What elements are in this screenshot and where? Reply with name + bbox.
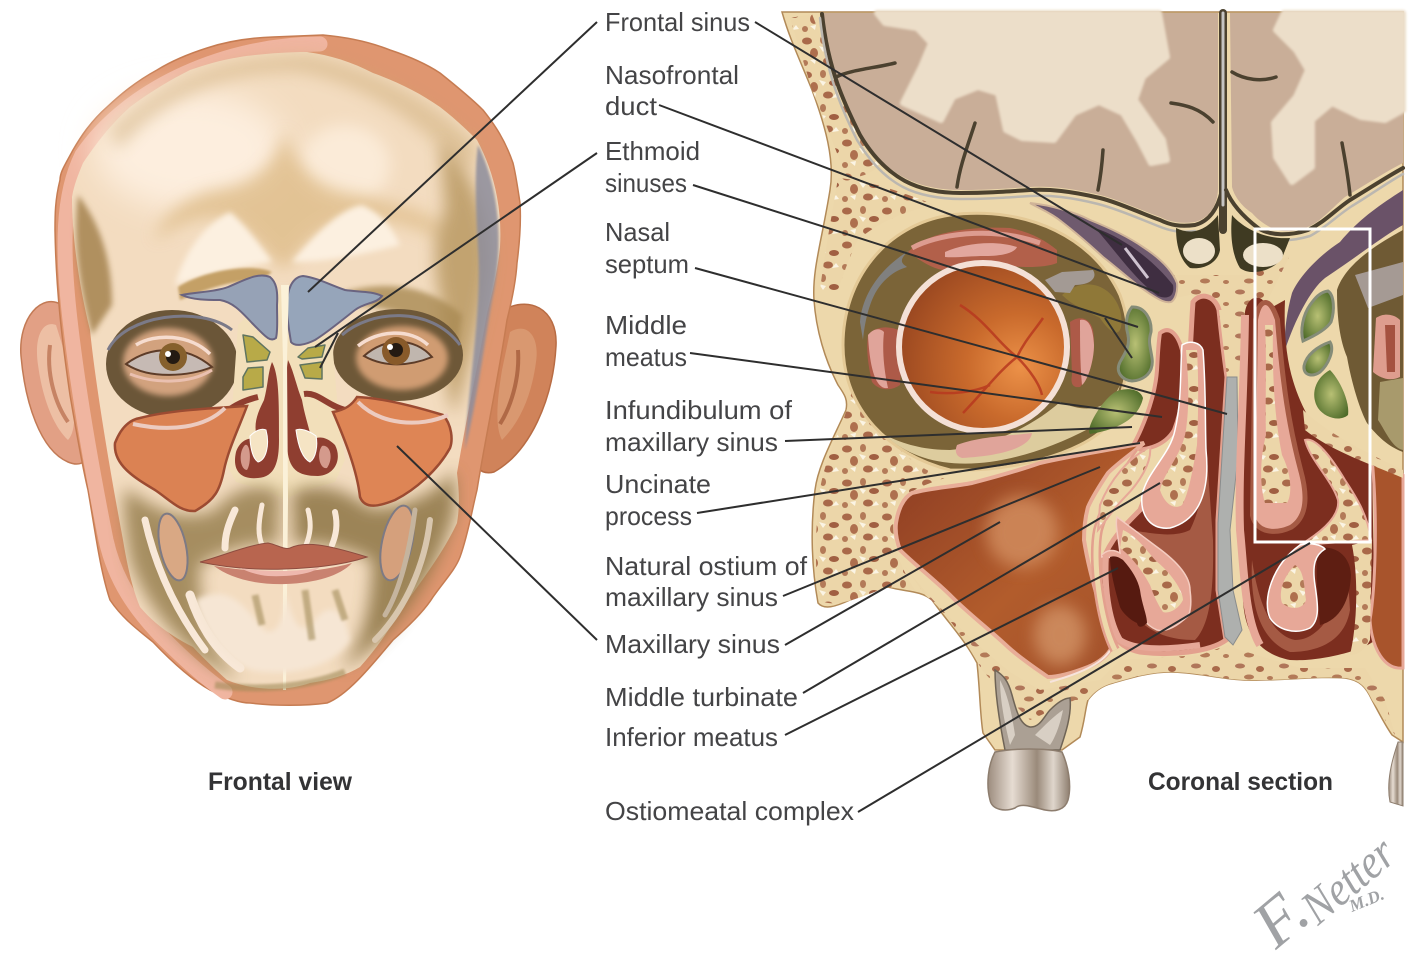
label: Nasofrontal duct: duct [605, 91, 658, 121]
left inferior turbinate [1100, 517, 1191, 630]
right antrum [1370, 458, 1403, 668]
right cavity base [1243, 297, 1375, 660]
label: Nasal septum: septum [605, 249, 689, 279]
label: Middle meatus [605, 310, 687, 372]
orbital rim highlight over sinus [133, 402, 448, 428]
left meatus slit [1130, 330, 1184, 450]
left main cavity [1100, 296, 1227, 654]
left eye [106, 310, 238, 418]
orbit: olive fat [1062, 284, 1122, 333]
shading: left temple [76, 195, 112, 335]
head outline [55, 35, 520, 705]
label: Nasal septum: Nasal [605, 217, 670, 247]
frontal view illustration: head [21, 35, 556, 705]
frontal sinus: left [182, 275, 277, 340]
mouth [200, 543, 367, 584]
shading: left brow brown [178, 268, 272, 300]
right orbit [1337, 230, 1403, 452]
orbit: left muscle [867, 327, 903, 389]
brain: left hemisphere [820, 13, 1218, 223]
shading: right grey side stripe [465, 145, 499, 450]
left nasal cavity [1100, 296, 1227, 654]
eyeball [899, 263, 1067, 431]
leader lines [308, 22, 1310, 812]
ethmoid cells: right, green [1302, 291, 1348, 419]
label: Frontal sinus: Frontal sinus [605, 7, 750, 37]
label: Natural ostium of maxillary sinus: Natural ostium of [605, 551, 808, 581]
right lateral bone band [1303, 410, 1403, 478]
right mid-brown mucosa [1252, 560, 1350, 652]
orbit: right muscle [1070, 318, 1094, 387]
right inferior meatus [1317, 547, 1351, 625]
label: Uncinate process [605, 469, 711, 531]
label: Infundibulum of maxillary sinus: maxillary sinus [605, 427, 778, 457]
frontal sinus: right [287, 276, 382, 345]
ethmoid sinus cells: left [243, 335, 270, 390]
label: Middle meatus: Middle [605, 310, 687, 340]
shading: forehead light [95, 90, 285, 210]
white box: ostiomeatal area [1255, 229, 1370, 542]
nasal cavity: left [226, 362, 279, 478]
right molar [1389, 742, 1403, 806]
left pink rim [65, 44, 320, 692]
orbit: inferior muscle [956, 433, 1032, 458]
heading: Coronal section: Coronal section [1148, 768, 1333, 796]
lower face base shading: right [292, 470, 455, 670]
label: Ostiomeatal complex: Ostiomeatal complex [605, 796, 854, 826]
cheek muscle: right [374, 503, 420, 583]
maxillary sinus, coronal [896, 443, 1144, 682]
section silhouette: bone [782, 12, 1403, 750]
orbit [843, 213, 1129, 470]
label: Middle turbinate: Middle turbinate [605, 682, 798, 712]
left molar [988, 670, 1070, 811]
label: Nasofrontal duct [605, 60, 739, 121]
chin: brown streaks [215, 590, 345, 688]
nasal cavity: right [285, 360, 345, 476]
right superior turbinate [1255, 305, 1303, 529]
maxillary sinus: left [115, 406, 247, 511]
icon: right ear [470, 304, 556, 473]
label: Infundibulum of maxillary sinus: Infundibulum of [605, 395, 793, 425]
label: Ethmoid sinuses: Ethmoid [605, 136, 700, 166]
orbit: lower cream fat [885, 385, 1120, 464]
olfactory bulbs [1176, 215, 1290, 272]
label: Uncinate process: process [605, 501, 692, 531]
skull and face base [72, 52, 500, 689]
shading: central forehead tan [155, 130, 445, 270]
coronal section illustration [782, 12, 1403, 811]
orbit: optic nerve [1045, 270, 1094, 293]
shading: brow highlight right [292, 205, 400, 262]
shading: right forehead light [300, 125, 390, 205]
midline nasal septum [281, 285, 289, 690]
right purple duct [1285, 190, 1403, 350]
ethmoid cells: left, green [1089, 307, 1152, 434]
left middle turbinate [1142, 342, 1207, 528]
signature: Netter [1290, 826, 1406, 935]
lower face base shading: left [124, 487, 280, 680]
lateral nasal wall and uncinate process [1096, 447, 1150, 650]
chin: light area [195, 590, 350, 673]
left mid-brown mucosa [1119, 430, 1213, 640]
maxillary sinus: right [333, 397, 452, 506]
left lateral pink wall [1106, 555, 1200, 648]
label: Middle meatus: meatus [605, 342, 687, 372]
inferior meatus slit [1110, 556, 1147, 627]
spongy bone: above orbit [820, 178, 935, 290]
spongy bone: central ethmoid roof [1165, 255, 1290, 375]
label: Nasofrontal duct: Nasofrontal [605, 60, 739, 90]
ethmoid sinus cells: right [298, 345, 325, 379]
frontal sinus, purple [1030, 203, 1177, 302]
right inferior turbinate [1267, 544, 1325, 631]
label: Natural ostium of maxillary sinus: maxillary sinus [605, 582, 778, 612]
label: Nasal septum [605, 217, 689, 279]
right nasal cavity [1240, 297, 1403, 668]
right uncinate bone [1300, 440, 1371, 545]
signature [1238, 826, 1406, 956]
label: Maxillary sinus: Maxillary sinus [605, 629, 780, 659]
right eye [333, 309, 463, 401]
label: Ethmoid sinuses: sinuses [605, 168, 687, 198]
label: Infundibulum of maxillary sinus [605, 395, 793, 457]
heading: Frontal view: Frontal view [208, 768, 353, 796]
spongy bone: zygomatic [816, 390, 945, 603]
right inferior lateral wall [1350, 540, 1372, 655]
spongy bone: lateral frontal strip [790, 14, 880, 177]
icon: left ear [21, 302, 92, 464]
brain: right hemisphere [1230, 13, 1403, 231]
cheek muscle: left [153, 511, 193, 583]
nose area bone [224, 290, 345, 500]
shading: upper rim tan [110, 55, 478, 175]
right medial pink wall [1240, 315, 1260, 645]
label: Inferior meatus: Inferior meatus [605, 722, 778, 752]
orbit: grey shadow [860, 250, 910, 340]
retinal vessels [930, 305, 1043, 413]
orbit: superior muscle [908, 228, 1057, 270]
label: Ethmoid sinuses [605, 136, 700, 198]
signature: M.D. [1345, 885, 1387, 916]
label: Natural ostium of maxillary sinus [605, 551, 808, 612]
nasal septum [1218, 310, 1245, 645]
shading: right temple [435, 140, 490, 415]
shading: right brow brown [345, 286, 462, 345]
label: Uncinate process: Uncinate [605, 469, 711, 499]
shading: brow highlight left [175, 212, 272, 285]
facial muscle striations [145, 505, 430, 668]
meninges: falx and sulci [820, 13, 1403, 240]
spongy bone: maxillary floor [900, 560, 1395, 735]
